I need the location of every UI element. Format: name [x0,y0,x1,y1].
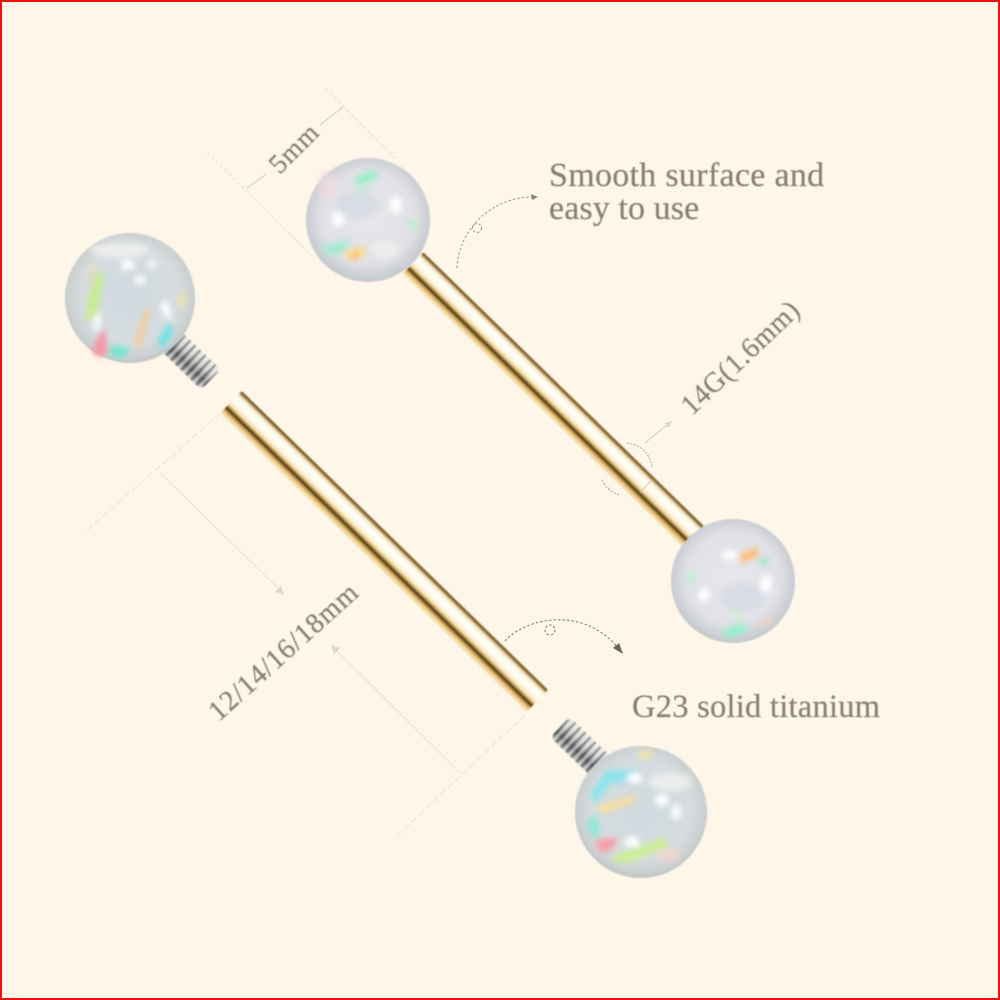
label: smooth surface: Smooth surface and [549,157,824,194]
dimension guides: ball diameter 5mm [207,88,397,257]
exploded barbell: bar [220,391,548,712]
label: gauge: 14G(1.6mm) [675,295,807,421]
label: easy to use: easy to use [549,190,699,227]
top opal ball [306,158,430,282]
label: material: G23 solid titanium [632,689,880,725]
curved dashed arrow: surface [457,194,538,268]
left opal ball [65,233,195,363]
label: bar length: 12/14/16/18mm [203,577,365,727]
bottom opal ball [575,746,707,878]
left screw [160,330,221,390]
dashed gauge circle [602,421,672,495]
label: 5mm: 5mm [263,117,325,179]
dimension guides: bar length [87,412,525,836]
bottom screw [550,717,611,777]
top bar [403,252,704,548]
top assembled barbell [306,158,795,643]
lower right opal ball [671,519,795,643]
left ball with screw [65,233,221,390]
bottom ball with screw [550,717,707,878]
curved dashed arrow: titanium [505,620,623,654]
